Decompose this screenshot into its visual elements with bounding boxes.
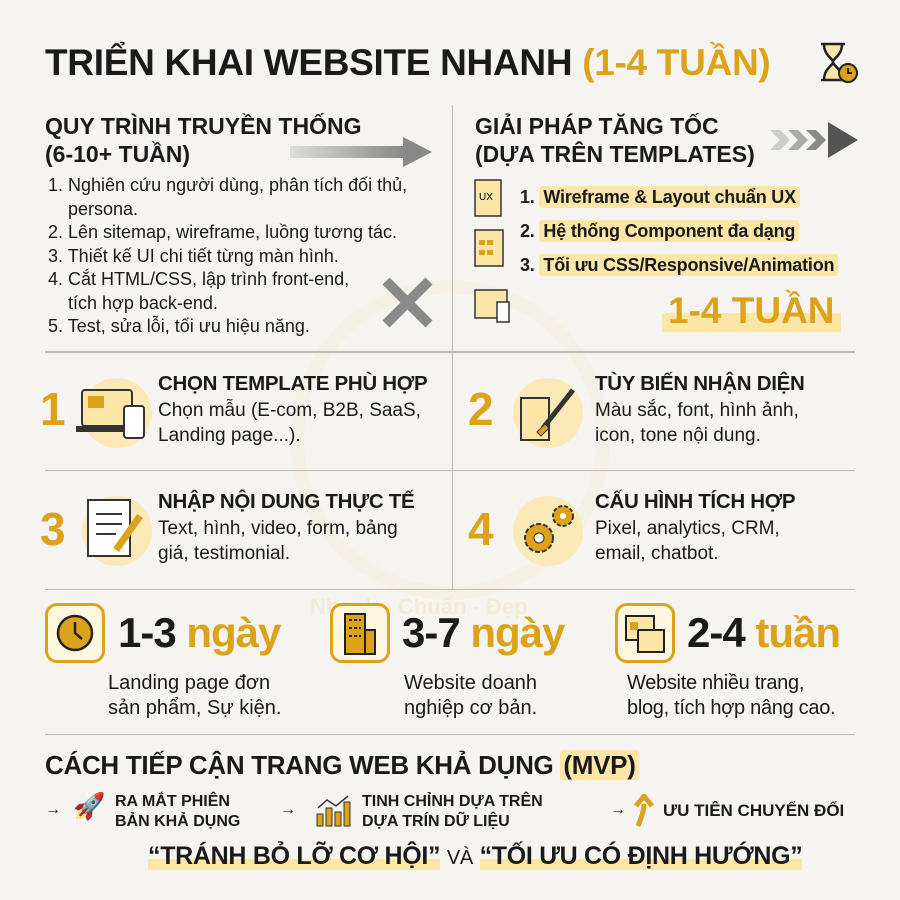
list: traditional steps: 3. Thiết kế UI chi tiết từng màn hình. [48, 246, 339, 266]
text: tùy biến: Màu sắc, font, hình ảnh, [595, 400, 799, 421]
mvp steps: → [610, 801, 626, 818]
text: cấu hình: Pixel, analytics, CRM, [595, 518, 780, 539]
list: template steps: 3. Tối ưu CSS/Responsive/Animation [520, 255, 834, 275]
mvp steps: → [45, 801, 61, 818]
text: tùy biến: icon, tone nội dung. [595, 425, 761, 446]
step: launch [45, 791, 240, 830]
timeline 2 [330, 603, 566, 719]
text: desc 2: Website doanh [404, 672, 537, 694]
list: traditional steps [48, 175, 407, 336]
list: template steps: 2. Hệ thống Component đa dạng [520, 221, 795, 241]
icon: windows [615, 603, 675, 663]
mvp steps: RA MẮT PHIÊN [115, 793, 230, 810]
icon: clock [45, 603, 105, 663]
list: template steps [520, 186, 838, 276]
text: desc 2: nghiệp cơ bản. [404, 697, 537, 719]
heading: MVP: CÁCH TIẾP CẬN TRANG WEB KHẢ DỤNG (MVP) [45, 750, 636, 780]
text: cấu hình: CẤU HÌNH TÍCH HỢP [595, 490, 795, 513]
text: desc 3 [627, 672, 835, 719]
quote: “TRÁNH BỎ LỠ CƠ HỘI” VÀ “TỐI ƯU CÓ ĐỊNH HƯỚNG” [148, 842, 802, 870]
list: traditional steps: 4. Cắt HTML/CSS, lập trình front-end, [48, 269, 349, 289]
icon: hourglass [821, 42, 858, 83]
text: desc 1: Landing page đơn [108, 672, 270, 694]
text: tùy biến [595, 372, 804, 446]
list: traditional steps: 5. Test, sửa lỗi, tối ưu hiệu năng. [48, 316, 310, 336]
mvp steps [45, 791, 844, 830]
heading: templates: (DỰA TRÊN TEMPLATES) [475, 141, 755, 167]
text: chọn template: Landing page...). [158, 425, 301, 446]
timeline 1 [45, 603, 282, 719]
icons: template docs: UX [479, 192, 493, 203]
step 2 [468, 372, 804, 448]
step 4 [468, 490, 795, 566]
timeline 2: 3-7 ngày [402, 609, 564, 656]
text: nhập nội dung: NHẬP NỘI DUNG THỰC TẾ [158, 490, 414, 513]
watermark slogan: Nhanh - Chuẩn - Đẹp [310, 594, 528, 619]
text: tùy biến: TÙY BIẾN NHẬN DIỆN [595, 372, 804, 395]
text: nhập nội dung: giá, testimonial. [158, 543, 290, 564]
list: template steps: 1. Wireframe & Layout chuẩn UX [520, 187, 796, 207]
timeline 3 [615, 603, 840, 719]
text: cấu hình [595, 490, 795, 564]
icons: template docs [474, 179, 510, 323]
mvp steps: → [280, 801, 296, 818]
text: chọn template: Chọn mẫu (E-com, B2B, SaaS, [158, 400, 421, 421]
timeline 3: 2-4 tuần [687, 609, 840, 656]
step 3 [40, 490, 414, 566]
arrow: chevrons [770, 122, 858, 158]
text: chọn template [158, 372, 427, 446]
number 3: 3 [40, 503, 66, 555]
callout: 1-4 tuần: 1-4 TUẦN [668, 290, 835, 331]
icon: document pen [82, 496, 152, 566]
mvp steps: BẢN KHẢ DỤNG [115, 813, 240, 830]
step: conversion [610, 794, 844, 827]
text: desc 2 [404, 672, 537, 719]
mvp steps: 🚀 [73, 791, 105, 821]
text: nhập nội dung [158, 490, 414, 564]
icon: brush palette [513, 378, 583, 448]
title: TRIỂN KHAI WEBSITE NHANH (1-4 TUẦN) [45, 42, 770, 83]
heading: traditional: (6-10+ TUẦN) [45, 141, 190, 167]
text: desc 1: sản phẩm, Sự kiện. [108, 697, 281, 719]
list: traditional steps: 1. Nghiên cứu người dùng, phân tích đối thủ, [48, 175, 407, 195]
mvp steps: ƯU TIÊN CHUYỂN ĐỔI [663, 801, 844, 820]
mvp steps: DỰA TRÍN DỮ LIỆU [362, 813, 510, 830]
list: traditional steps: persona. [68, 198, 138, 218]
number 1: 1 [40, 383, 66, 435]
text: cấu hình: email, chatbot. [595, 543, 719, 564]
icon: gears [513, 496, 583, 566]
text: desc 1 [108, 672, 281, 719]
arrow: gray [290, 137, 432, 167]
step: refine [280, 792, 543, 830]
panel: templates [474, 113, 858, 332]
icon: building [330, 603, 390, 663]
number 2: 2 [468, 383, 494, 435]
mvp steps: TINH CHỈNH DỰA TRÊN [362, 793, 543, 810]
heading: templates: GIẢI PHÁP TĂNG TỐC [475, 113, 719, 139]
step 1 [40, 372, 427, 448]
text: desc 3: blog, tích hợp nâng cao. [627, 697, 835, 719]
text: desc 3: Website nhiều trang, [627, 672, 804, 694]
heading: traditional [45, 113, 361, 167]
heading: traditional: QUY TRÌNH TRUYỀN THỐNG [45, 113, 361, 139]
timeline 1: 1-3 ngày [118, 609, 280, 656]
list: traditional steps: 2. Lên sitemap, wireframe, luồng tương tác. [48, 222, 397, 242]
list: traditional steps: tích hợp back-end. [68, 292, 218, 312]
panel: traditional [45, 113, 432, 336]
number 4: 4 [468, 503, 494, 555]
watermark [290, 280, 610, 600]
heading: templates [475, 113, 755, 167]
icon: laptop [82, 378, 152, 448]
text: nhập nội dung: Text, hình, video, form, bảng [158, 518, 398, 539]
text: chọn template: CHỌN TEMPLATE PHÙ HỢP [158, 372, 427, 395]
icon: cross [382, 278, 432, 328]
